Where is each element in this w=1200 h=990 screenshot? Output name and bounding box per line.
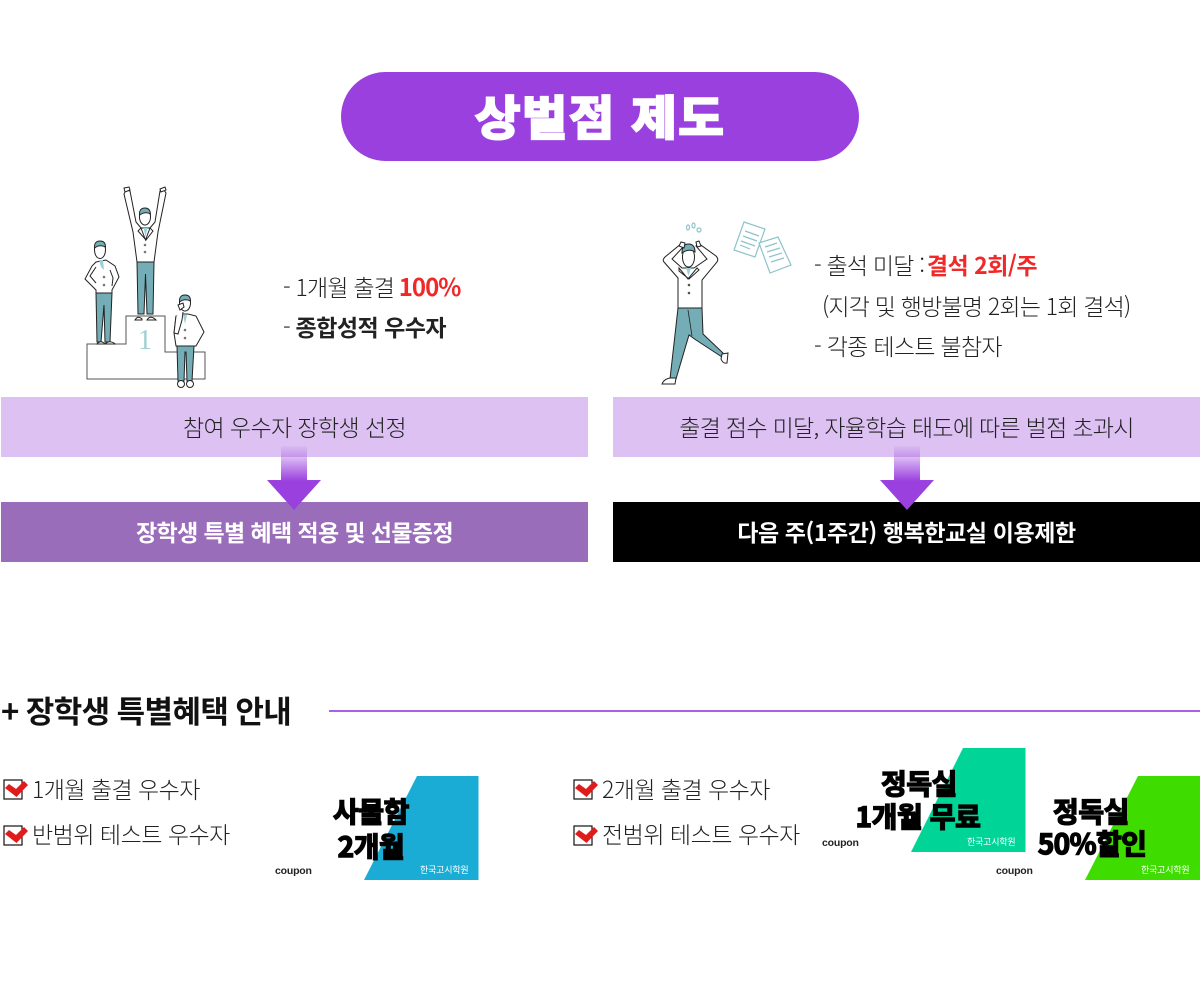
coupon value: 50%할인 — [1038, 823, 1146, 863]
check icon — [573, 779, 598, 800]
right result bar — [613, 502, 1200, 562]
arrow: right — [880, 446, 934, 510]
benefit group: left — [3, 771, 230, 850]
left result bar — [1, 502, 588, 562]
coupon label: coupon — [822, 837, 859, 849]
section heading: + 장학생 특별혜택 안내 — [1, 687, 291, 732]
arrow: left — [267, 446, 321, 510]
coupon shape — [364, 776, 478, 880]
coupon: study room free — [822, 748, 1026, 852]
coupon title: 정독실 — [881, 763, 957, 803]
right criteria text — [814, 247, 1130, 362]
title pill — [341, 72, 859, 161]
item: attendance: 2개월 출결 우수자 — [602, 771, 770, 805]
check icon — [3, 825, 28, 846]
line: absence note: (지각 및 행방불명 2회는 1회 결석) — [822, 288, 1130, 322]
item: test: 전범위 테스트 우수자 — [602, 816, 800, 850]
coupon title: 사물함 — [333, 791, 409, 831]
right condition bar: 출결 점수 미달, 자율학습 태도에 따른 벌점 초과시 — [679, 409, 1134, 443]
left criteria text — [283, 268, 461, 343]
coupon label: coupon — [275, 865, 312, 877]
title pill: 상벌점 제도 — [475, 80, 725, 149]
left result bar: 장학생 특별 혜택 적용 및 선물증정 — [136, 514, 453, 548]
right condition bar — [613, 397, 1200, 457]
coupon shape — [1085, 776, 1200, 880]
coupon shape — [911, 748, 1026, 852]
heading rule — [329, 710, 1200, 712]
left condition bar — [1, 397, 588, 457]
check icon — [573, 825, 598, 846]
line: absence: - 출석 미달 : 결석 2회/주 — [814, 247, 1037, 281]
coupon: locker — [275, 776, 478, 880]
illustration: winners on podium — [84, 186, 206, 388]
coupon value: 1개월 무료 — [855, 796, 980, 836]
check icon — [3, 779, 28, 800]
coupon label: coupon — [996, 865, 1033, 877]
left condition bar: 참여 우수자 장학생 선정 — [183, 409, 406, 443]
coupon title: 정독실 — [1053, 791, 1129, 831]
line: missed tests: - 각종 테스트 불참자 — [814, 328, 1002, 362]
coupon: study room discount — [996, 776, 1200, 880]
line: attendance: - 1개월 출결 100% — [283, 268, 460, 303]
illustration: distressed student with papers — [661, 221, 792, 384]
line: top overall grade: - 종합성적 우수자 — [283, 309, 446, 343]
academy name: 한국고시학원 — [420, 863, 468, 876]
item: test: 반범위 테스트 우수자 — [32, 816, 230, 850]
right result bar: 다음 주(1주간) 행복한교실 이용제한 — [737, 514, 1076, 548]
coupon value: 2개월 — [338, 826, 404, 866]
academy name: 한국고시학원 — [967, 835, 1015, 848]
item: attendance: 1개월 출결 우수자 — [32, 771, 200, 805]
benefit group: right — [573, 771, 800, 850]
illustration: winners on podium: 1 — [138, 325, 152, 356]
academy name: 한국고시학원 — [1141, 863, 1189, 876]
